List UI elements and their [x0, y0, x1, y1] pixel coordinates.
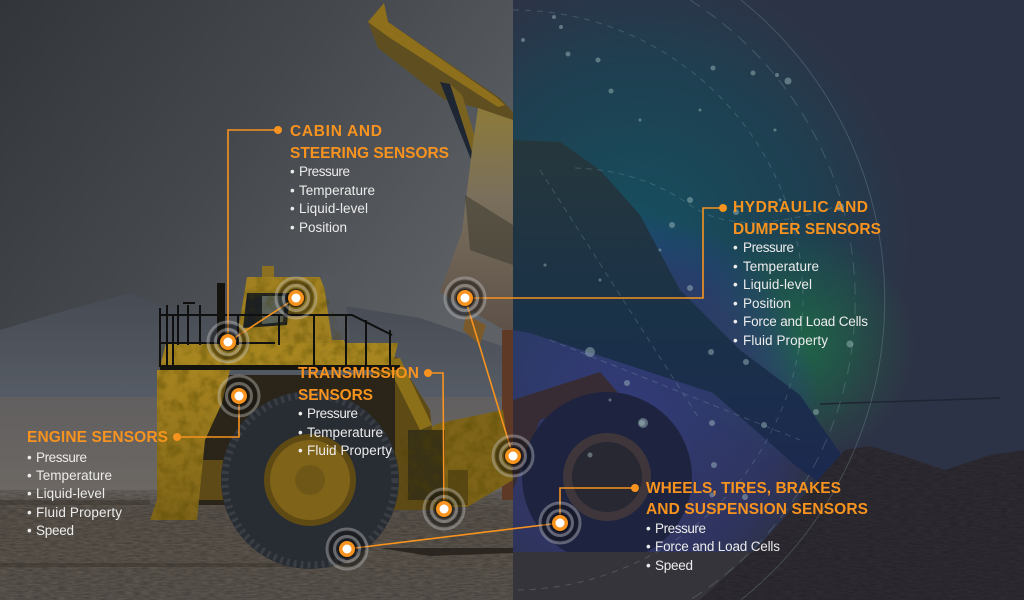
mining truck [140, 3, 513, 569]
sensor marker: rear wheel [540, 503, 580, 543]
text block: hydraulic and dumper sensors: HYDRAULIC AND [733, 199, 868, 216]
text block: engine sensors: • [27, 523, 32, 538]
text block: wheels, tires, brakes and suspension sensors: WHEELS, TIRES, BRAKES [646, 480, 841, 497]
sensor marker: front wheel [327, 529, 367, 569]
text block: transmission sensors: • [298, 425, 303, 440]
dump bed canopy arm [368, 3, 513, 125]
sensor marker: dumper lower [493, 436, 533, 476]
text block: cabin and steering sensors [290, 123, 449, 235]
text block: cabin and steering sensors: Pressure [299, 164, 350, 179]
text block: hydraulic and dumper sensors: • [733, 240, 738, 255]
connector lines [177, 130, 723, 549]
text block: wheels, tires, brakes and suspension sensors: AND SUSPENSION SENSORS [646, 501, 868, 518]
sensor marker: hydraulic [445, 278, 485, 318]
text block: transmission sensors: • [298, 406, 303, 421]
sensor marker: cabin upper [276, 278, 316, 318]
hoist column [502, 330, 513, 500]
cabin [236, 277, 345, 343]
text block: transmission sensors: • [298, 443, 303, 458]
rear frame [432, 410, 513, 507]
text block: cabin and steering sensors: CABIN AND [290, 123, 382, 140]
text block: engine sensors: • [27, 450, 32, 465]
text block: cabin and steering sensors: Temperature [299, 183, 375, 198]
text block: transmission sensors: Pressure [307, 406, 358, 421]
text block: engine sensors: • [27, 505, 32, 520]
front tire [221, 391, 399, 569]
ground [513, 552, 752, 600]
text block: hydraulic and dumper sensors: Temperature [743, 259, 819, 274]
railings [160, 303, 392, 367]
text block: cabin and steering sensors: Position [299, 220, 347, 235]
text block: cabin and steering sensors: Liquid-level [299, 201, 368, 216]
text block: wheels, tires, brakes and suspension sensors: Pressure [655, 521, 706, 536]
rust and dirt mottling [155, 277, 508, 520]
text block: hydraulic and dumper sensors [733, 199, 881, 348]
text block: cabin and steering sensors: • [290, 220, 295, 235]
text block: wheels, tires, brakes and suspension sensors: • [646, 539, 651, 554]
colour glow [513, 24, 856, 300]
text block: transmission sensors: SENSORS [298, 387, 373, 404]
text block: hydraulic and dumper sensors: • [733, 314, 738, 329]
text block: transmission sensors [298, 365, 419, 458]
connector end dots [173, 126, 727, 492]
text block: cabin and steering sensors: • [290, 164, 295, 179]
text block: cabin and steering sensors: • [290, 183, 295, 198]
background photo scene [0, 0, 513, 600]
text block: hydraulic and dumper sensors: Liquid-level [743, 277, 812, 292]
load heap [513, 140, 845, 490]
text block: transmission sensors: Temperature [307, 425, 383, 440]
lower front body [150, 370, 230, 520]
deck bar [160, 365, 400, 370]
text block: engine sensors: Pressure [36, 450, 87, 465]
text block: engine sensors: Speed [36, 523, 74, 538]
text block: cabin and steering sensors: • [290, 201, 295, 216]
under-body shadow [195, 375, 395, 505]
sensor marker: transmission [424, 489, 464, 529]
text block: engine sensors: Temperature [36, 468, 112, 483]
text block: engine sensors [27, 429, 168, 538]
rear wheel [522, 392, 692, 562]
text block: engine sensors: • [27, 486, 32, 501]
text block: cabin and steering sensors: STEERING SENSORS [290, 145, 449, 162]
text block: wheels, tires, brakes and suspension sensors: • [646, 521, 651, 536]
right technology overlay panel [513, 0, 1024, 600]
text block: hydraulic and dumper sensors: Position [743, 296, 791, 311]
dumper chassis [513, 372, 620, 490]
dump bed wall [440, 108, 513, 335]
text block: hydraulic and dumper sensors: • [733, 333, 738, 348]
sand mound [700, 446, 1024, 600]
text block: wheels, tires, brakes and suspension sensors: Force and Load Cells [655, 539, 780, 554]
mountains [0, 300, 502, 397]
sensor marker: cabin lower [208, 322, 248, 362]
constellation rings and dots [513, 0, 885, 600]
text block: hydraulic and dumper sensors: Fluid Property [743, 333, 828, 348]
deck [160, 343, 398, 367]
text block: engine sensors: Liquid-level [36, 486, 105, 501]
text block: hydraulic and dumper sensors: DUMPER SENSORS [733, 221, 881, 238]
text block: hydraulic and dumper sensors: Pressure [743, 240, 794, 255]
text block: wheels, tires, brakes and suspension sensors: Speed [655, 558, 693, 573]
text block: engine sensors: • [27, 468, 32, 483]
text block: wheels, tires, brakes and suspension sensors: • [646, 558, 651, 573]
text block: hydraulic and dumper sensors: • [733, 296, 738, 311]
text block: wheels, tires, brakes and suspension sensors [646, 480, 868, 573]
text block: hydraulic and dumper sensors: Force and Load Cells [743, 314, 868, 329]
text block: transmission sensors: Fluid Property [307, 443, 392, 458]
ground [0, 397, 513, 600]
text block: engine sensors: ENGINE SENSORS [27, 429, 168, 446]
text block: transmission sensors: TRANSMISSION [298, 365, 419, 382]
text block: hydraulic and dumper sensors: • [733, 277, 738, 292]
sensor marker: engine [219, 376, 259, 416]
text block: engine sensors: Fluid Property [36, 505, 122, 520]
text block: hydraulic and dumper sensors: • [733, 259, 738, 274]
